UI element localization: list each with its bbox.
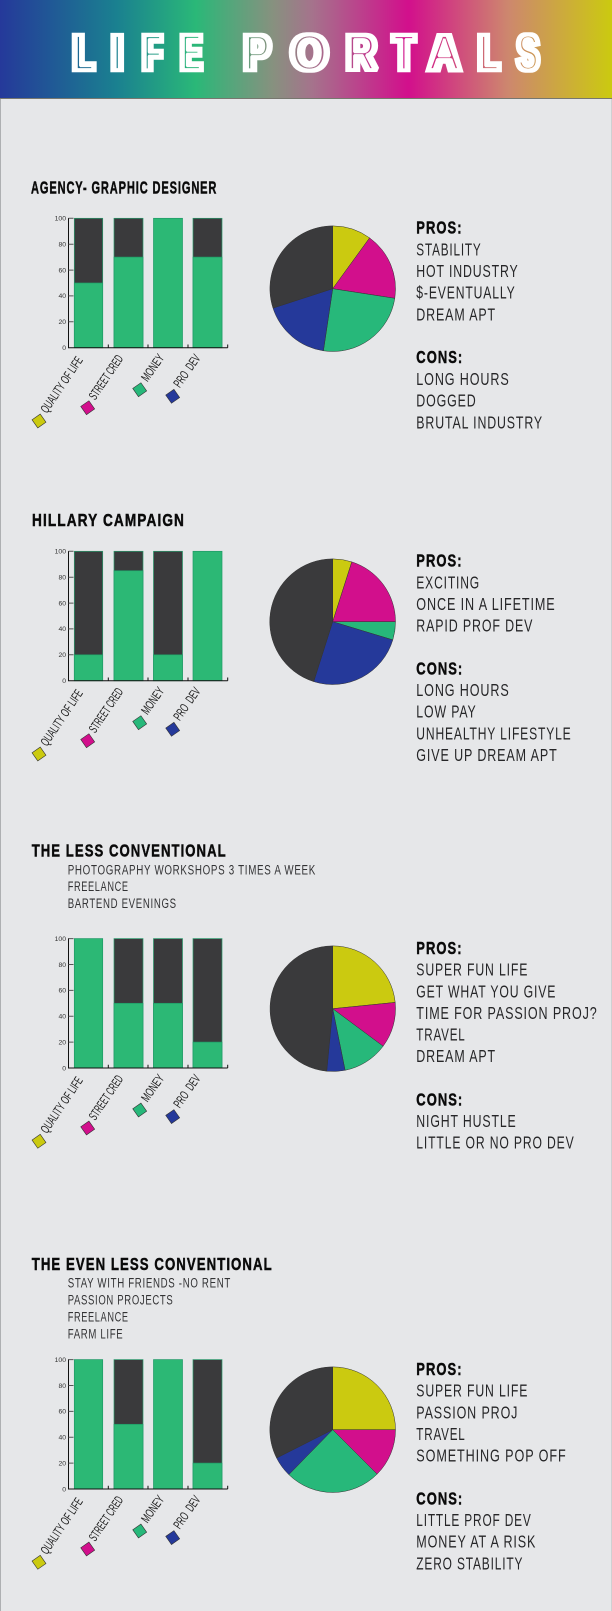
legend: less conventional: PRO DEV — [171, 1072, 204, 1110]
pros and cons: hillary — [416, 551, 572, 765]
pie chart: less conventional — [270, 946, 396, 1072]
legend: even less conventional: PRO DEV — [171, 1493, 204, 1531]
title: I — [113, 25, 122, 80]
legend: less conventional: MONEY — [138, 1072, 167, 1104]
bar chart: hillary: 0 — [62, 678, 66, 685]
title: O — [292, 25, 327, 80]
pros and cons: agency: CONS: — [416, 347, 463, 367]
title: T — [394, 25, 414, 80]
bar chart: agency: 60 — [58, 267, 66, 274]
legend: hillary: QUALITY OF LIFE — [38, 687, 86, 749]
description: even less conventional: PASSION PROJECTS — [68, 1293, 173, 1309]
pros and cons: less conventional: DREAM APT — [416, 1046, 496, 1066]
pros and cons: agency: PROS: — [416, 217, 463, 237]
pros and cons: agency: DREAM APT — [416, 304, 496, 324]
pros and cons: less conventional: NIGHT HUSTLE — [416, 1111, 517, 1131]
title: F — [143, 25, 161, 80]
description: even less conventional: FARM LIFE — [68, 1326, 123, 1342]
bar chart: agency — [55, 216, 228, 352]
description: even less conventional: STAY WITH FRIENDS -NO RENT — [68, 1276, 231, 1292]
bar chart: less conventional: 40 — [58, 1014, 66, 1020]
pros and cons: agency — [416, 217, 543, 432]
pros and cons: agency: BRUTAL INDUSTRY — [416, 412, 543, 432]
pros and cons: even less conventional: PROS: — [416, 1359, 463, 1379]
pros and cons: hillary: RAPID PROF DEV — [416, 616, 533, 636]
pros and cons: even less conventional: ZERO STABILITY — [416, 1553, 523, 1573]
title: A — [429, 25, 459, 80]
legend: hillary — [32, 684, 204, 761]
title: R — [347, 25, 376, 80]
bar chart: agency: 100 — [55, 216, 66, 223]
legend: agency: MONEY — [138, 351, 167, 384]
pros and cons: less conventional: SUPER FUN LIFE — [416, 960, 528, 980]
title: L — [479, 25, 499, 80]
bar chart: even less conventional: 80 — [58, 1383, 66, 1390]
panel: agency graphic designer — [31, 178, 543, 432]
bar chart: agency: 0 — [62, 345, 66, 352]
pros and cons: even less conventional: CONS: — [416, 1488, 463, 1508]
description: less conventional — [68, 862, 316, 912]
legend: agency — [32, 351, 204, 428]
legend: even less conventional: STREET CRED — [86, 1494, 126, 1544]
heading: even less conventional: THE EVEN LESS CONVENTIONAL — [32, 1254, 273, 1274]
pie chart: even less conventional — [270, 1367, 396, 1492]
pros and cons: less conventional: TRAVEL — [416, 1025, 466, 1045]
title: P — [245, 25, 270, 80]
legend: hillary: PRO DEV — [171, 684, 204, 723]
title: L — [479, 25, 499, 80]
pros and cons: agency: LONG HOURS — [416, 369, 510, 389]
title — [74, 25, 538, 80]
pros and cons: hillary: LOW PAY — [416, 702, 477, 722]
bar chart: even less conventional: 20 — [58, 1460, 66, 1467]
pros and cons: less conventional: PROS: — [416, 938, 463, 958]
bar chart: agency: 20 — [58, 319, 66, 326]
title: S — [518, 25, 538, 80]
legend: agency: PRO DEV — [171, 351, 204, 390]
bar chart: hillary: 20 — [58, 652, 66, 659]
pros and cons: agency: DOGGED — [416, 391, 477, 411]
title: A — [429, 25, 459, 80]
pros and cons: even less conventional: MONEY AT A RISK — [416, 1532, 536, 1552]
pros and cons: less conventional — [416, 938, 598, 1153]
title: L — [74, 25, 93, 80]
pie chart: agency — [270, 226, 396, 351]
title: P — [245, 25, 270, 80]
pros and cons: hillary: CONS: — [416, 658, 463, 678]
title: E — [182, 25, 201, 80]
bar chart: less conventional: 0 — [62, 1065, 66, 1072]
title: S — [518, 25, 538, 80]
title: E — [182, 25, 201, 80]
heading: agency: AGENCY- GRAPHIC DESIGNER — [31, 178, 217, 198]
pros and cons: agency: HOT INDUSTRY — [416, 261, 519, 281]
title: R — [347, 25, 376, 80]
heading: less conventional: THE LESS CONVENTIONAL — [32, 841, 227, 861]
description: less conventional: PHOTOGRAPHY WORKSHOPS 3 TIMES A WEEK — [68, 862, 316, 878]
pros and cons: even less conventional — [416, 1359, 567, 1573]
heading: hillary: HILLARY CAMPAIGN — [32, 510, 185, 530]
panel: hillary campaign — [32, 510, 572, 765]
bar chart: hillary — [55, 549, 228, 685]
legend: less conventional: QUALITY OF LIFE — [38, 1074, 86, 1136]
legend: agency: STREET CRED — [86, 352, 126, 402]
title: L — [74, 25, 93, 80]
legend: even less conventional — [32, 1493, 204, 1569]
pros and cons: even less conventional: PASSION PROJ — [416, 1402, 518, 1422]
legend: even less conventional: MONEY — [138, 1493, 167, 1525]
description: even less conventional: FREELANCE — [68, 1310, 129, 1326]
title: O — [292, 25, 327, 80]
bar chart: even less conventional: 100 — [55, 1357, 66, 1364]
bar chart: hillary: 60 — [58, 600, 66, 607]
pros and cons: hillary: EXCITING — [416, 572, 480, 592]
description: less conventional: FREELANCE — [68, 879, 129, 895]
description: even less conventional — [68, 1276, 231, 1342]
legend: less conventional: STREET CRED — [86, 1073, 126, 1123]
bar chart: less conventional: 20 — [58, 1039, 66, 1046]
pros and cons: agency: STABILITY — [416, 239, 482, 259]
bar chart: even less conventional: 60 — [58, 1409, 66, 1416]
pros and cons: even less conventional: TRAVEL — [416, 1424, 466, 1444]
bar chart: less conventional: 60 — [58, 988, 66, 995]
bar chart: even less conventional — [55, 1357, 228, 1493]
panel: the even less conventional — [32, 1254, 567, 1573]
pros and cons: agency: $-EVENTUALLY — [416, 283, 516, 303]
pie chart: hillary — [270, 559, 396, 685]
bar chart: less conventional: 100 — [55, 936, 66, 943]
bar chart: even less conventional: 0 — [62, 1486, 66, 1493]
bar chart: hillary: 80 — [58, 574, 66, 582]
legend: hillary: STREET CRED — [86, 685, 126, 735]
panel: the less conventional — [32, 841, 598, 1153]
bar chart: agency: 40 — [58, 293, 66, 300]
pros and cons: less conventional: CONS: — [416, 1089, 463, 1109]
title: I — [113, 25, 122, 80]
bar chart: hillary: 40 — [58, 626, 66, 633]
legend: less conventional — [32, 1072, 204, 1148]
legend: even less conventional: QUALITY OF LIFE — [38, 1495, 86, 1557]
title: F — [143, 25, 161, 80]
pros and cons: hillary: LONG HOURS — [416, 680, 510, 700]
description: less conventional: BARTEND EVENINGS — [68, 896, 177, 912]
pros and cons: even less conventional: LITTLE PROF DEV — [416, 1510, 532, 1530]
bar chart: hillary: 100 — [55, 549, 66, 556]
title: T — [394, 25, 414, 80]
bar chart: even less conventional: 40 — [58, 1435, 66, 1442]
pros and cons: even less conventional: SUPER FUN LIFE — [416, 1381, 528, 1401]
pros and cons: hillary: PROS: — [416, 551, 463, 571]
bar chart: less conventional: 80 — [58, 962, 66, 969]
bar chart: less conventional — [55, 936, 228, 1072]
legend: hillary: MONEY — [138, 684, 167, 717]
legend: agency: QUALITY OF LIFE — [38, 354, 86, 416]
bar chart: agency: 80 — [58, 242, 66, 248]
header banner — [0, 0, 612, 99]
pros and cons: hillary: ONCE IN A LIFETIME — [416, 594, 556, 614]
